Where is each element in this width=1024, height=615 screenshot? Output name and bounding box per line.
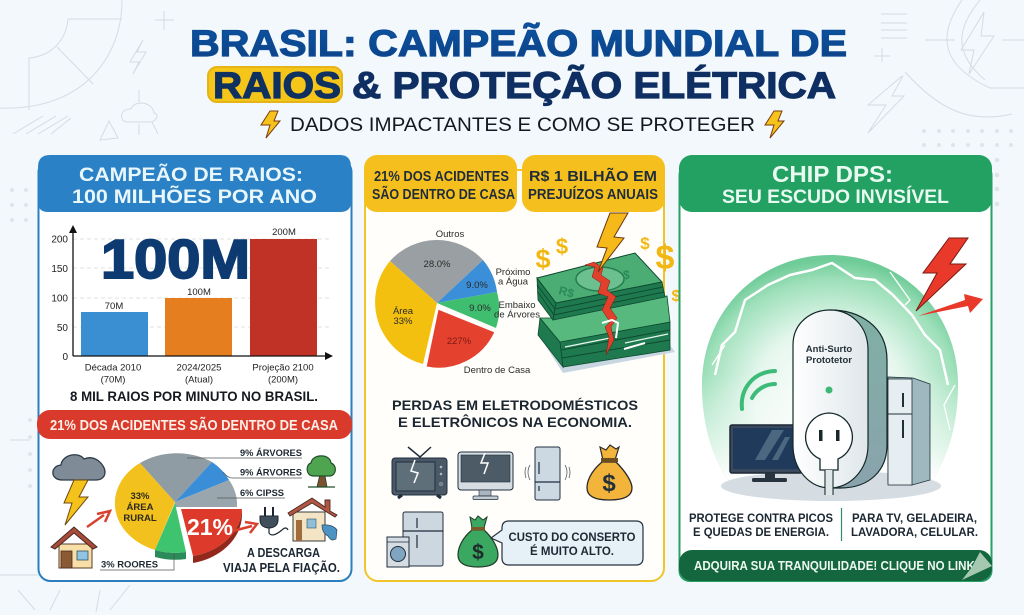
plug xyxy=(806,413,852,470)
descarga text: VIAJA PELA FIAÇÃO. xyxy=(223,560,340,575)
label: área rural: ÁREA xyxy=(127,502,154,513)
arrow: deflected xyxy=(918,294,983,316)
icon: red lightning xyxy=(916,238,968,311)
slice: próximo à água xyxy=(437,260,497,303)
bar: década 2010: 70M xyxy=(105,301,123,312)
big number: 100M xyxy=(101,228,250,290)
device label: Anti-Surto xyxy=(806,344,852,355)
slice: área xyxy=(375,261,437,364)
panel header: CHIP DPS: xyxy=(772,161,893,187)
panel: prejuízos xyxy=(364,155,681,581)
callout: custo do conserto: É MUITO ALTO. xyxy=(530,545,614,558)
slice: azul xyxy=(175,462,229,502)
bar chart: (Atual) xyxy=(185,374,213,386)
shadow xyxy=(721,471,941,501)
pie chart: Dentro de Casa xyxy=(464,365,531,376)
icon: broken tv xyxy=(392,447,447,498)
icon: fridge xyxy=(525,447,570,500)
upper stack: R$ xyxy=(557,283,576,301)
callout: custo do conserto: CUSTO DO CONSERTO xyxy=(508,532,636,544)
bar: 2024/2025: 100M xyxy=(187,287,211,298)
lower stack xyxy=(538,296,675,373)
pie chart: Próximo xyxy=(496,267,530,278)
pie chart: Embaixo xyxy=(499,300,535,311)
subtitle text: DADOS IMPACTANTES E COMO SE PROTEGER xyxy=(290,115,755,136)
slice: outros xyxy=(390,240,483,303)
bar: 2024/2025 xyxy=(165,287,232,356)
losses text xyxy=(392,397,638,430)
tear xyxy=(585,262,617,355)
benefit text right xyxy=(851,511,978,539)
upper stack xyxy=(537,253,665,320)
pie leader labels xyxy=(100,448,302,570)
pie chart: 9.0% xyxy=(469,303,491,314)
pie leader labels: 6% CIPSS xyxy=(240,488,284,499)
icon: money bag green xyxy=(458,516,498,567)
panel header xyxy=(679,155,992,212)
led xyxy=(826,386,832,394)
icon: washer and fridge xyxy=(387,512,443,567)
pie chart: 9.0% xyxy=(466,280,488,291)
pie chart: Área xyxy=(393,306,414,317)
bar: projeção 2100 xyxy=(250,227,317,356)
slice: verde xyxy=(155,503,186,553)
header: 21%: SÃO DENTRO DE CASA xyxy=(372,185,515,203)
bar chart: Década 2010 xyxy=(85,362,141,374)
bar chart: 150 xyxy=(51,264,68,275)
losses text: E ELETRÔNICOS NA ECONOMIA. xyxy=(398,413,632,430)
dollar signs: $ xyxy=(556,234,568,259)
benefit text left: PROTEGE CONTRA PICOS xyxy=(689,511,833,525)
benefit text right: PARA TV, GELADEIRA, xyxy=(852,511,977,525)
bar: projeção 2100: 200M xyxy=(272,227,296,238)
icon: tv xyxy=(730,425,802,482)
shield dome xyxy=(702,255,958,490)
icon: fridge xyxy=(888,377,930,485)
header: R$ 1 bilhão xyxy=(522,155,665,212)
dollar signs: $ xyxy=(672,288,681,305)
descarga text: A DESCARGA xyxy=(247,546,320,560)
panel header: CAMPEÃO DE RAIOS: xyxy=(79,163,303,186)
bar chart xyxy=(51,225,333,386)
icon: house with wiring xyxy=(288,498,337,541)
lightning bolt xyxy=(597,213,628,272)
panel: chip dps xyxy=(679,155,992,581)
arrow: house to pie xyxy=(87,511,110,527)
panel: campeão de raios xyxy=(37,155,352,581)
icon: bolt left xyxy=(261,111,280,138)
device label: Prototetor xyxy=(806,355,852,366)
axes xyxy=(73,232,327,356)
icon: signal arcs xyxy=(742,371,775,409)
pie chart: a Água xyxy=(498,276,529,288)
panel header: SEU ESCUDO INVISÍVEL xyxy=(722,186,949,208)
icon: tree xyxy=(307,456,335,487)
pie chart: 227% xyxy=(447,336,472,347)
arrow: 21% to plug xyxy=(233,522,257,533)
pie chart: 33% xyxy=(393,316,413,327)
red banner: 21% DOS ACIDENTES SÃO DENTRO DE CASA xyxy=(50,416,338,434)
icon: house xyxy=(51,527,97,568)
icon: bolt right xyxy=(765,111,784,138)
bar chart: 50 xyxy=(57,323,68,334)
device label xyxy=(806,344,852,366)
header: 21% xyxy=(364,155,517,212)
subtitle xyxy=(261,111,784,138)
icon: money bag yellow xyxy=(587,445,632,500)
icon: money bag yellow: $ xyxy=(602,470,616,497)
benefit text left xyxy=(689,511,833,539)
slice: área rural xyxy=(115,463,175,550)
header: R$ 1 bilhão: PREJUÍZOS ANUAIS xyxy=(528,186,658,203)
slice: cinza direito xyxy=(175,480,237,507)
cta banner: ADQUIRA SUA TRANQUILIDADE! CLIQUE NO LINK. xyxy=(694,558,978,573)
device: anti-surto xyxy=(793,310,887,495)
header: 21%: 21% DOS ACIDENTES xyxy=(374,169,509,185)
title line 2: & PROTEÇÃO ELÉTRICA xyxy=(352,64,836,106)
callout: custo do conserto xyxy=(491,521,643,565)
dollar signs: $ xyxy=(640,234,650,253)
panel header: 100 MILHÕES POR ANO xyxy=(72,184,317,208)
illustration: broken money stack xyxy=(535,213,681,373)
bar chart: (70M) xyxy=(101,374,125,386)
title xyxy=(190,22,847,106)
pie chart 3d xyxy=(115,453,242,563)
label: área rural: 33% xyxy=(130,491,150,502)
slice: dentro de casa xyxy=(426,309,495,368)
icon: broken monitor xyxy=(458,452,513,500)
bar chart: 2024/2025 xyxy=(177,362,221,374)
stat text: 8 MIL RAIOS POR MINUTO NO BRASIL. xyxy=(70,389,318,404)
dollar signs: $ xyxy=(656,239,675,277)
cta banner xyxy=(679,550,992,581)
pie chart: Outros xyxy=(436,229,465,240)
red banner xyxy=(37,410,352,439)
pie leader labels: 9% ÁRVORES xyxy=(240,448,302,459)
benefit text right: LAVADORA, CELULAR. xyxy=(851,525,978,539)
upper stack: $ xyxy=(623,268,630,282)
bar chart: (200M) xyxy=(268,374,298,386)
pie chart: 28.0% xyxy=(424,259,451,270)
slice: 21%: 21% xyxy=(187,514,233,540)
bar chart: 100 xyxy=(51,294,68,304)
header: R$ 1 bilhão: R$ 1 BILHÃO EM xyxy=(529,167,657,185)
bar: década 2010 xyxy=(81,301,148,356)
dollar signs: $ xyxy=(535,244,551,274)
cable xyxy=(825,470,833,495)
label: área rural xyxy=(123,491,157,524)
bar chart: 0 xyxy=(62,352,68,363)
bar chart: 200 xyxy=(51,234,68,246)
label: área rural: RURAL xyxy=(123,513,157,524)
pie chart xyxy=(375,229,540,376)
highlight: RAIOS: RAIOS xyxy=(213,65,341,106)
title line 1: BRASIL: CAMPEÃO MUNDIAL DE xyxy=(190,22,847,64)
pie leader labels: 9% ÁRVORES xyxy=(240,468,302,478)
icon: plug xyxy=(260,507,288,535)
losses text: PERDAS EM ELETRODOMÉSTICOS xyxy=(392,397,638,413)
panel header xyxy=(38,155,351,212)
icon: storm cloud xyxy=(53,455,105,525)
icon: money bag green: $ xyxy=(472,541,484,564)
slice: cinza superior xyxy=(140,453,212,502)
pie chart: de Árvores xyxy=(494,310,540,320)
pie leader labels: 3% ROORES xyxy=(101,560,158,570)
bar chart: Projeção 2100 xyxy=(252,362,314,374)
slice: embaixo de árvores xyxy=(437,292,499,328)
dollar signs xyxy=(535,234,681,305)
benefit text left: E QUEDAS DE ENERGIA. xyxy=(693,525,829,539)
descarga text xyxy=(223,546,340,575)
